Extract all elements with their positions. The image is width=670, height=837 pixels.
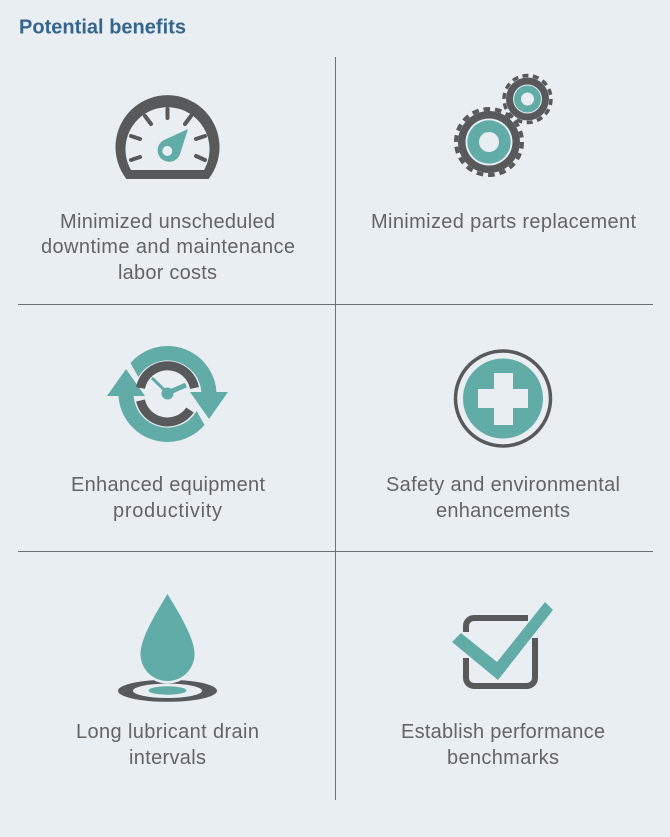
panel: equipment productivity (71, 346, 265, 522)
label: benchmarks: benchmarks (447, 747, 559, 769)
label: downtime: downtime and maintenance (41, 236, 295, 258)
label: productivity: Enhanced equipment (71, 474, 265, 496)
panel: parts replacement (371, 76, 636, 233)
panel: safety and environmental (386, 351, 620, 522)
label: productivity: productivity (113, 500, 222, 522)
label: lubricant: Long lubricant drain (76, 721, 259, 743)
icon: speedometer gauge (116, 95, 220, 179)
label: downtime: Minimized unscheduled (60, 211, 275, 233)
icon: medical cross (456, 351, 550, 446)
label: downtime: labor costs (118, 262, 217, 284)
icon: gears (456, 76, 551, 175)
label: safety: Safety and environmental (386, 474, 620, 496)
label: benchmarks (401, 721, 605, 769)
label: lubricant (76, 721, 259, 769)
label: productivity (71, 474, 265, 522)
icon: checkbox (452, 602, 553, 686)
icon: oil drop (118, 594, 217, 702)
label: parts replacement: Minimized parts replacement (371, 211, 636, 233)
panel: minimized downtime (41, 95, 295, 284)
label: downtime (41, 211, 295, 284)
label: safety: enhancements (436, 500, 570, 522)
label: safety (386, 474, 620, 522)
label: benchmarks: Establish performance (401, 721, 605, 743)
panel: benchmarks (401, 602, 605, 769)
panel: lubricant drain (76, 594, 259, 769)
icon: clock with cycle arrows (107, 346, 228, 442)
label: lubricant: intervals (129, 747, 206, 769)
title: Potential benefits (19, 16, 186, 38)
